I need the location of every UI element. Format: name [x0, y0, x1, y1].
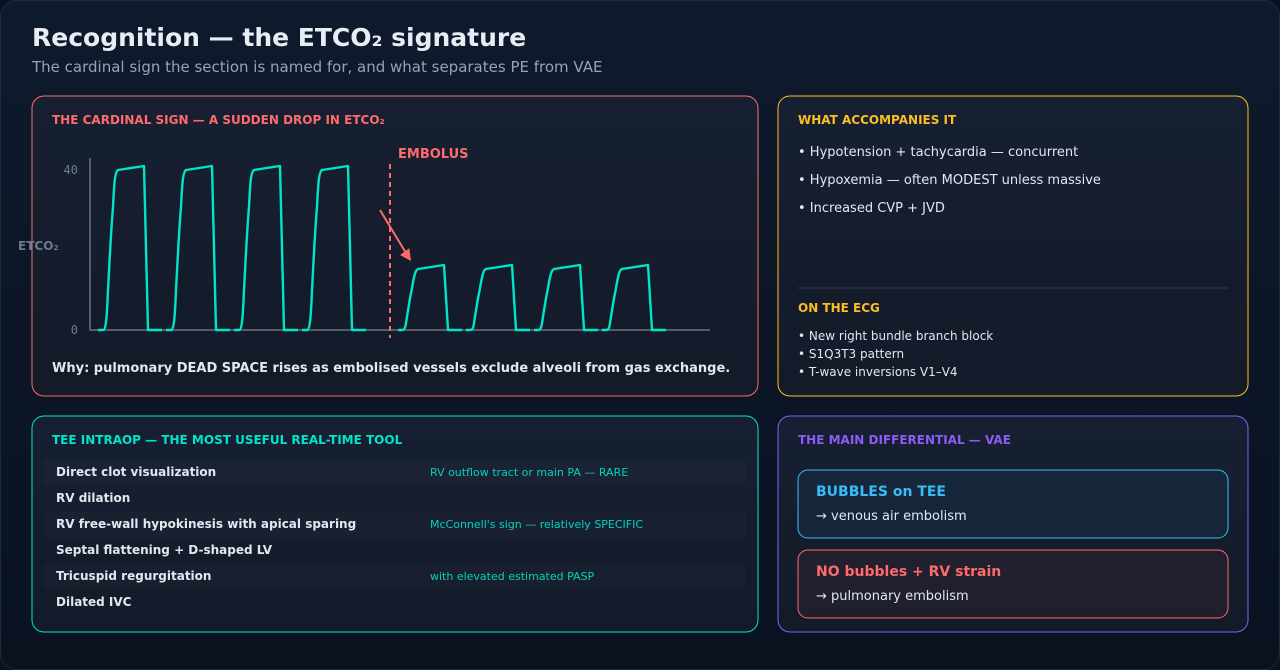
- chart: capnography waveform: [18, 147, 710, 338]
- reduced capnogram waves: [398, 265, 666, 330]
- embolus label: EMBOLUS: [398, 147, 469, 162]
- panel: main differential: [778, 416, 1248, 632]
- heading: main differential: THE MAIN DIFFERENTIAL — VAE: [798, 433, 1011, 447]
- arrow: drop in ETCO2: [380, 210, 411, 261]
- panel: TEE intraop: [32, 416, 758, 632]
- table: TEE findings: Tricuspid regurgitation: [56, 569, 211, 583]
- axes: [90, 158, 710, 330]
- table: TEE findings: Dilated IVC: [56, 595, 132, 609]
- callout: bubbles on TEE: BUBBLES on TEE: [816, 484, 946, 500]
- heading: on the ECG: ON THE ECG: [798, 301, 880, 315]
- heading: what accompanies it: WHAT ACCOMPANIES IT: [798, 113, 957, 127]
- callout: bubbles on TEE: [798, 470, 1228, 538]
- embolus marker line: [389, 164, 391, 338]
- callout: no bubbles: [798, 550, 1228, 618]
- heading: TEE intraop: TEE INTRAOP — THE MOST USEFUL REAL-TIME TOOL: [52, 433, 403, 447]
- list: ECG findings: • T-wave inversions V1–V4: [798, 365, 958, 379]
- explanation: Why: pulmonary DEAD SPACE rises as embolised vessels exclude alveoli from gas exchange.: [52, 361, 730, 376]
- y axis tick 0: 0: [71, 323, 78, 337]
- table: TEE findings: RV dilation: [56, 491, 130, 505]
- table: TEE findings: Direct clot visualization: [56, 465, 216, 479]
- subtitle: The cardinal sign the section is named for, and what separates PE from VAE: [31, 58, 602, 76]
- callout: no bubbles: NO bubbles + RV strain: [816, 564, 1001, 580]
- callout: bubbles on TEE: → venous air embolism: [816, 509, 967, 524]
- list: ECG findings: [798, 329, 993, 379]
- callout: no bubbles: → pulmonary embolism: [816, 589, 969, 604]
- title: Recognition — the ETCO₂ signature: [32, 23, 526, 52]
- list: accompanying signs: • Hypoxemia — often MODEST unless massive: [798, 173, 1101, 188]
- list: ECG findings: • New right bundle branch block: [798, 329, 993, 343]
- table: TEE findings: RV outflow tract or main PA — RARE: [430, 466, 628, 479]
- y axis tick 40: 40: [64, 163, 78, 177]
- list: accompanying signs: [798, 145, 1101, 216]
- table: TEE findings: [44, 459, 746, 609]
- panel: cardinal sign: [18, 96, 758, 396]
- heading: cardinal sign: THE CARDINAL SIGN — A SUDDEN DROP IN ETCO₂: [52, 113, 385, 127]
- table: TEE findings: RV free-wall hypokinesis with apical sparing: [56, 517, 356, 531]
- y axis label: ETCO₂: [18, 239, 59, 253]
- normal capnogram waves: [98, 166, 366, 330]
- table: TEE findings: with elevated estimated PASP: [430, 570, 595, 583]
- table: TEE findings: McConnell's sign — relatively SPECIFIC: [430, 518, 643, 531]
- table: TEE findings: Septal flattening + D-shaped LV: [56, 543, 273, 557]
- list: accompanying signs: • Increased CVP + JVD: [798, 201, 945, 216]
- list: ECG findings: • S1Q3T3 pattern: [798, 347, 904, 361]
- list: accompanying signs: • Hypotension + tachycardia — concurrent: [798, 145, 1078, 160]
- panel: what accompanies it: [778, 96, 1248, 396]
